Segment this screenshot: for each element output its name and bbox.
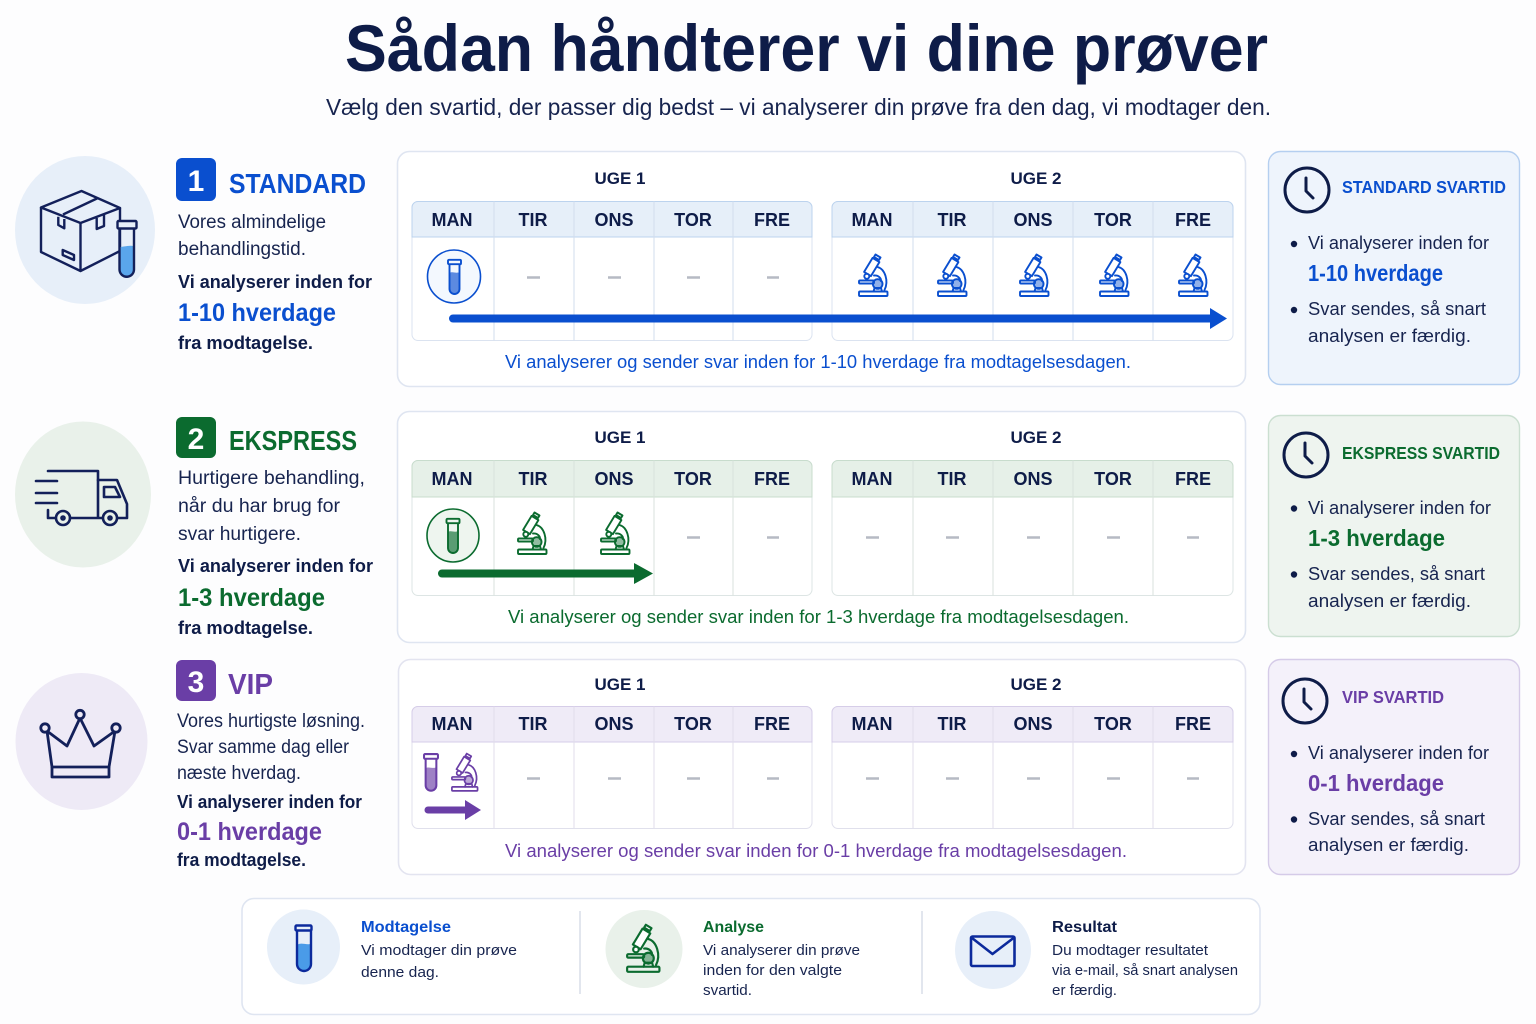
arrow: express timeline [438, 563, 653, 584]
icon: clock [1284, 433, 1328, 477]
description: standard: Vores almindelige [178, 212, 326, 233]
legend: result: Resultat [1052, 919, 1118, 936]
icon: received sample [428, 250, 480, 303]
description: vip: fra modtagelse. [177, 849, 306, 870]
heading: vip response time: VIP SVARTID [1342, 687, 1444, 707]
description: vip: 0-1 hverdage [177, 818, 322, 846]
panel: express schedule [398, 412, 1246, 642]
heading: standard: STANDARD [229, 168, 366, 199]
icons: analysis days [518, 512, 630, 554]
table: week 1: ONS [594, 714, 634, 734]
caption: express: Vi analyserer og sender svar inden for 1-3 hverdage fra modtagelsesdagen. [508, 606, 1129, 627]
list: standard response time [1291, 233, 1489, 346]
table: week 1: TOR [674, 714, 712, 734]
table: week 1: ONS [594, 210, 634, 230]
list: vip response time: analysen er færdig. [1308, 835, 1469, 855]
legend: result: er færdig. [1052, 982, 1117, 999]
list: express response time [1291, 498, 1491, 611]
week labels [594, 675, 1062, 694]
panel: vip schedule [398, 660, 1246, 874]
row 3: vip [16, 660, 365, 870]
row 1: standard [15, 156, 372, 353]
caption: standard: Vi analyserer og sender svar inden for 1-10 hverdage fra modtagelsesdagen. [505, 351, 1131, 372]
heading: express: EKSPRESS [229, 425, 357, 456]
table: week 1: MAN [432, 714, 472, 734]
table: week 1: MAN [432, 210, 472, 230]
badge 1 [176, 158, 216, 201]
table: week 1: TIR [518, 210, 548, 230]
legend: result [955, 911, 1238, 999]
panel: express response time [1268, 416, 1520, 636]
week labels: UGE 1 [594, 428, 646, 447]
legend: received: Vi modtager din prøve [361, 942, 517, 959]
icon: clock [1283, 679, 1327, 723]
table: week 2: FRE [1175, 714, 1211, 734]
week labels: UGE 2 [1010, 428, 1062, 447]
table: week 1: MAN [432, 469, 472, 489]
list: standard response time: Svar sendes, så snart [1308, 299, 1486, 319]
table: week 2: TIR [938, 714, 966, 734]
week labels: UGE 1 [594, 675, 646, 694]
table: week 1: TOR [674, 469, 712, 489]
icon: box with test tube [15, 156, 155, 304]
table: week 1 [412, 460, 812, 596]
description: express: Vi analyserer inden for [178, 555, 373, 576]
heading: standard response time: STANDARD SVARTID [1342, 177, 1506, 197]
badge 2 [176, 417, 216, 458]
list: vip response time: Vi analyserer inden for [1308, 743, 1489, 763]
week labels [594, 169, 1062, 188]
description: standard: Vi analyserer inden for [178, 271, 372, 292]
badge 2: 2 [188, 423, 204, 456]
description: vip: Vores hurtigste løsning. [177, 711, 365, 732]
legend: analysis [606, 910, 860, 999]
title: Sådan håndterer vi dine prøver [345, 11, 1268, 85]
description: express: når du har brug for [178, 496, 341, 517]
badge 3: 3 [188, 666, 204, 699]
icon: crown [16, 673, 148, 810]
week labels: UGE 1 [594, 169, 646, 188]
heading: vip: VIP [228, 669, 273, 701]
table: week 1: TIR [518, 714, 548, 734]
week labels: UGE 2 [1010, 169, 1062, 188]
description: standard: fra modtagelse. [178, 332, 313, 353]
table: week 2 [832, 460, 1233, 596]
panel: standard schedule [398, 152, 1246, 386]
description: vip [177, 711, 365, 870]
icon: clock [1285, 168, 1329, 212]
icons: sample and analysis same day [424, 754, 478, 791]
description: express: 1-3 hverdage [178, 584, 325, 612]
description: express [178, 468, 373, 638]
table: week 2: MAN [852, 210, 892, 230]
legend: analysis: inden for den valgte [703, 962, 842, 979]
table: week 2: TOR [1094, 714, 1132, 734]
legend panel [242, 898, 1260, 1014]
description: express: svar hurtigere. [178, 524, 301, 545]
table: week 2: FRE [1175, 469, 1211, 489]
legend: result: Du modtager resultatet [1052, 942, 1209, 959]
legend: received [267, 910, 517, 984]
table: week 2: MAN [852, 714, 892, 734]
panel: vip response time [1268, 660, 1520, 874]
list: express response time: analysen er færdig. [1308, 591, 1471, 611]
description: express: fra modtagelse. [178, 617, 313, 638]
table: week 1: TIR [518, 469, 548, 489]
arrow: standard timeline [449, 308, 1227, 329]
week labels [594, 428, 1062, 447]
table: week 2: TOR [1094, 469, 1132, 489]
list: standard response time: 1-10 hverdage [1308, 260, 1443, 286]
icon: received sample [427, 509, 479, 562]
list: vip response time: Svar sendes, så snart [1308, 809, 1485, 829]
heading: express response time: EKSPRESS SVARTID [1342, 443, 1500, 463]
description: vip: Vi analyserer inden for [177, 791, 362, 812]
panel: standard response time [1268, 152, 1520, 384]
badge 3 [176, 660, 216, 701]
legend: result: via e-mail, så snart analysen [1052, 962, 1238, 979]
table: week 1 [412, 202, 812, 340]
row 2: express [15, 417, 373, 638]
table: week 1: FRE [754, 210, 790, 230]
table: week 2: FRE [1175, 210, 1211, 230]
legend: analysis: Analyse [703, 919, 764, 936]
table: week 1: TOR [674, 210, 712, 230]
description: standard: 1-10 hverdage [178, 299, 336, 327]
table: week 1: FRE [754, 714, 790, 734]
list: express response time: Svar sendes, så snart [1308, 564, 1485, 584]
description: standard [178, 212, 372, 353]
icon: delivery truck [15, 422, 151, 568]
legend: analysis: svartid. [703, 982, 752, 999]
list: standard response time: Vi analyserer inden for [1308, 233, 1489, 253]
table: week 2: ONS [1013, 714, 1053, 734]
table: week 2: ONS [1013, 210, 1053, 230]
subtitle: Vælg den svartid, der passer dig bedst – vi analyserer din prøve fra den dag, vi modtager den. [326, 94, 1271, 120]
description: vip: Svar samme dag eller [177, 737, 350, 758]
icons: analysis days [859, 254, 1208, 296]
table: week 1: ONS [594, 469, 634, 489]
table: week 1 [412, 706, 812, 828]
arrow: vip timeline [425, 800, 481, 820]
table: week 2 [832, 706, 1233, 828]
table: week 2 [832, 202, 1233, 340]
list: standard response time: analysen er færdig. [1308, 326, 1471, 346]
badge 1: 1 [188, 165, 204, 198]
table: week 2: TIR [938, 210, 966, 230]
table: week 2: MAN [852, 469, 892, 489]
legend: received: denne dag. [361, 964, 439, 981]
caption: vip: Vi analyserer og sender svar inden for 0-1 hverdage fra modtagelsesdagen. [505, 840, 1127, 861]
list: vip response time [1291, 743, 1489, 855]
legend: analysis: Vi analyserer din prøve [703, 942, 860, 959]
week labels: UGE 2 [1010, 675, 1062, 694]
description: standard: behandlingstid. [178, 239, 306, 260]
table: week 2: ONS [1013, 469, 1053, 489]
legend: received: Modtagelse [361, 919, 451, 936]
description: vip: næste hverdag. [177, 763, 301, 784]
table: week 1: FRE [754, 469, 790, 489]
table: week 2: TOR [1094, 210, 1132, 230]
list: vip response time: 0-1 hverdage [1308, 770, 1444, 796]
list: express response time: Vi analyserer inden for [1308, 498, 1491, 518]
table: week 2: TIR [938, 469, 966, 489]
description: express: Hurtigere behandling, [178, 468, 365, 489]
list: express response time: 1-3 hverdage [1308, 525, 1445, 551]
